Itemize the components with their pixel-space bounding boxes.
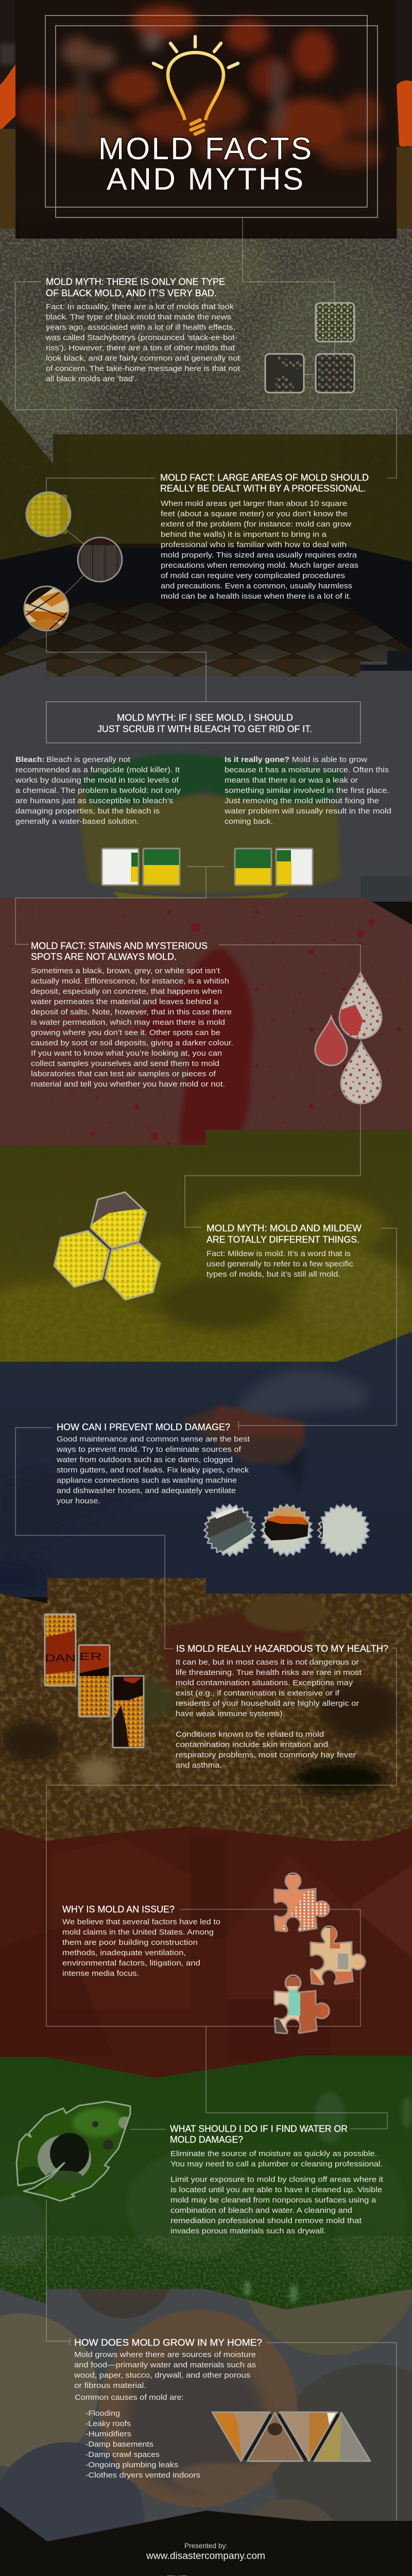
heading: IS MOLD REALLY HAZARDOUS TO MY HEALTH? bbox=[176, 1643, 388, 1654]
panel: what should I do bbox=[13, 2099, 384, 2235]
text: presented by: www.disastercompany.com bbox=[146, 2551, 265, 2562]
icon: light bulb bbox=[153, 37, 238, 134]
image: starburst badge 3 bbox=[313, 1503, 370, 1557]
text block: and precautions. Even a common, usually harmless bbox=[161, 582, 352, 590]
text block: invades porous materials such as drywall. bbox=[170, 2227, 326, 2235]
text block: years ago, associated with a lot of ill health effects, bbox=[46, 323, 235, 332]
text block: wood, paper, stucco, drywall, and other porous bbox=[74, 2371, 250, 2380]
text block: We believe that several factors have led to bbox=[62, 1918, 220, 1926]
text block: actually mold. Efflorescence, for instance, is a whitish bbox=[31, 977, 229, 986]
text block: was called Stachybotrys (pronounced ‘stack-ee-bot- bbox=[45, 333, 237, 342]
panel: bleach myth bbox=[15, 702, 391, 885]
text block: and asthma. bbox=[176, 1761, 222, 1770]
text block: Common causes of mold are: bbox=[75, 2393, 184, 2402]
heading: REALLY BE DEALT WITH BY A PROFESSIONAL. bbox=[160, 483, 366, 494]
panel: health hazard bbox=[45, 1614, 388, 1770]
text block: is water permeation, which may mean there is mold bbox=[31, 1018, 225, 1027]
list: common causes: -Ongoing plumbing leaks bbox=[85, 2461, 178, 2469]
panel: mildew myth bbox=[54, 1190, 362, 1300]
text block: is it gone: Mold is able to grow bbox=[292, 755, 367, 764]
panel background: olive room with floor bbox=[0, 397, 412, 680]
list: common causes: -Leaky roofs bbox=[85, 2419, 131, 2428]
heading box: JUST SCRUB IT WITH BLEACH TO GET RID OF IT. bbox=[97, 724, 312, 734]
panel background: soil with danger sign bbox=[0, 1578, 412, 1846]
text block: look black, and are fairly common and generally not bbox=[46, 354, 241, 363]
text block: Good maintenance and common sense are the best bbox=[57, 1435, 250, 1444]
heading: ARE TOTALLY DIFFERENT THINGS. bbox=[207, 1234, 359, 1245]
text block: is it gone bbox=[224, 755, 391, 826]
heading: MOLD DAMAGE? bbox=[170, 2134, 243, 2145]
text block: bleach: are humans just as susceptible to bleach’s bbox=[15, 796, 173, 805]
panel background: petri dishes bbox=[0, 2289, 412, 2541]
icon: puzzle piece 2 bbox=[310, 1926, 371, 1987]
list: common causes: -Damp basements bbox=[85, 2440, 153, 2449]
text block bbox=[170, 2149, 384, 2235]
panel background: red stained wall bbox=[0, 886, 412, 1154]
heading: HOW CAN I PREVENT MOLD DAMAGE? bbox=[57, 1422, 230, 1432]
heading: MOLD FACT: LARGE AREAS OF MOLD SHOULD bbox=[160, 472, 369, 483]
panel background: green water drops bbox=[0, 2056, 412, 2313]
text block: bleach: Bleach is generally not bbox=[46, 755, 131, 764]
text block: bleach: Bleach: bbox=[15, 755, 45, 764]
text block: water from outdoors such as ice dams, clogged bbox=[56, 1455, 233, 1464]
text block: have weak immune systems). bbox=[176, 1709, 285, 1718]
text block: Sometimes a black, brown, grey, or white spot isn’t bbox=[31, 967, 220, 975]
hero blurred mushroom background bbox=[15, 0, 397, 239]
text block: bleach: a chemical. The problem is twofold: not only bbox=[15, 786, 181, 795]
hero double frame bbox=[45, 15, 377, 217]
image: triangle crops bbox=[212, 2412, 370, 2461]
image: starburst badge 1 bbox=[203, 1503, 256, 1557]
text block: combination of bleach and water. A cleaning and bbox=[170, 2206, 352, 2215]
heading: MOLD MYTH: THERE IS ONLY ONE TYPE bbox=[46, 277, 225, 287]
text block: feet (about a square meter) or you don’t know the bbox=[161, 510, 348, 518]
heading: SPOTS ARE NOT ALWAYS MOLD. bbox=[31, 952, 177, 962]
text block: used generally to refer to a few specific bbox=[207, 1260, 354, 1268]
text block: Eliminate the source of moisture as quickly as possible. bbox=[170, 2149, 377, 2158]
heading bbox=[31, 941, 208, 962]
image: danger sign strips: ER bbox=[79, 1651, 102, 1663]
text block: material and tell you whether you have mold or not. bbox=[31, 1080, 225, 1089]
text block: of concern. The take-home message here is that not bbox=[46, 364, 241, 373]
text block: behind the walls) it is important to bring in a bbox=[161, 530, 327, 539]
icon: puzzle piece 3 bbox=[273, 1975, 335, 2036]
panel: hero bbox=[0, 0, 412, 239]
heading box: MOLD MYTH: IF I SEE MOLD, I SHOULD bbox=[117, 713, 293, 723]
image: sponge crops bbox=[102, 849, 313, 885]
text block: is it gone: means that there is or was a leak or bbox=[225, 776, 358, 785]
text block: contamination include skin irritation and bbox=[176, 1740, 328, 1749]
text block: When mold areas get larger than about 10 square bbox=[161, 499, 347, 508]
heading: OF BLACK MOLD, AND IT’S VERY BAD. bbox=[46, 288, 217, 298]
text block: them are poor building construction bbox=[62, 1938, 198, 1947]
text block: all black molds are ‘bad’. bbox=[46, 375, 137, 383]
heading: WHAT SHOULD I DO IF I FIND WATER OR bbox=[170, 2124, 348, 2134]
text block: mold properly. This sized area usually requires extra bbox=[161, 551, 357, 560]
text block: deposit, especially on concrete, that happens when bbox=[31, 987, 222, 996]
text block: bleach: recommended as a fungicide (mold killer). It bbox=[15, 766, 180, 774]
text block bbox=[62, 1918, 220, 1978]
panel: black mold myth bbox=[45, 277, 354, 393]
text block: collect samples yourselves and send them to mold bbox=[31, 1059, 219, 1068]
image: wood panel circle bbox=[78, 536, 122, 582]
text block: and dishwasher hoses, and adequately ventilate bbox=[57, 1486, 236, 1495]
title: AND MYTHS bbox=[107, 162, 303, 196]
text block: bleach bbox=[15, 755, 181, 826]
text block: mold may be cleaned from nonporous surfaces using a bbox=[170, 2196, 376, 2205]
text block: Conditions known to be related to mold bbox=[176, 1730, 324, 1739]
text block bbox=[30, 967, 233, 1089]
text block: If you want to know what you’re looking at, you can bbox=[31, 1049, 222, 1058]
text block: your house. bbox=[57, 1497, 100, 1505]
heading bbox=[160, 472, 369, 494]
panel background: floor extension and dark corner bbox=[46, 651, 412, 676]
text block: types of molds, but it’s still all mold. bbox=[207, 1270, 340, 1279]
text block: growing where you don’t see it. Other spots can be bbox=[31, 1028, 220, 1037]
panel background: red roofs bbox=[0, 1824, 412, 2081]
text block: water permeates the material and leaves behind a bbox=[30, 997, 219, 1006]
list: common causes: -Humidifiers bbox=[85, 2430, 131, 2438]
image: leaf with water drop bbox=[13, 2099, 134, 2202]
text block: ways to prevent mold. Try to eliminate sources of bbox=[56, 1445, 242, 1454]
image: starburst badge 2 bbox=[260, 1503, 314, 1557]
text block: Fact: In actuality, there are a lot of molds that look bbox=[46, 302, 234, 311]
text block: is it gone: coming back. bbox=[225, 817, 273, 826]
text block: laboratories that can test air samples or pieces of bbox=[31, 1070, 216, 1078]
text block bbox=[176, 1658, 362, 1770]
image: danger sign strips: DAN bbox=[45, 1653, 76, 1664]
text block: mold contamination situations. Exceptions may bbox=[176, 1679, 353, 1687]
text block: remediation professional should remove mold that bbox=[170, 2216, 362, 2225]
panel background: grey sponge bbox=[0, 662, 412, 904]
panel background: black footer bbox=[0, 2506, 412, 2545]
text block: and food—primarily water and materials such as bbox=[74, 2361, 256, 2369]
heading box bbox=[46, 702, 360, 743]
text block: of mold can require very complicated procedures bbox=[161, 571, 345, 580]
title: MOLD FACTS bbox=[98, 131, 312, 166]
text block: respiratory problems, most commonly hay fever bbox=[176, 1751, 356, 1759]
image: danger sign strips bbox=[45, 1614, 144, 1748]
text block: residents of your household are highly allergic or bbox=[176, 1699, 359, 1708]
heading: HOW DOES MOLD GROW IN MY HOME? bbox=[74, 2337, 262, 2348]
text block: deposit of salts. Note, however, that in this case there bbox=[31, 1008, 232, 1016]
text block: is it gone: Is it really gone? bbox=[225, 755, 289, 764]
text block: environmental factors, litigation, and bbox=[62, 1959, 200, 1968]
text block: precautions when removing mold. Much larger areas bbox=[161, 561, 358, 570]
panel background: black mold texture bbox=[0, 228, 412, 465]
list: common causes bbox=[85, 2409, 200, 2480]
hero side strips bbox=[0, 0, 412, 228]
text block: caused by soot or soil deposits, giving a darker colour. bbox=[31, 1039, 233, 1047]
text block: Limit your exposure to mold by closing off areas where it bbox=[170, 2175, 384, 2184]
heading: MOLD MYTH: MOLD AND MILDEW bbox=[207, 1223, 362, 1233]
heading bbox=[170, 2124, 348, 2145]
panel background: navy water bbox=[0, 1332, 412, 1600]
list: common causes: -Damp crawl spaces bbox=[85, 2450, 160, 2459]
text block: is it gone: water problem will usually result in the mold bbox=[224, 807, 391, 816]
text block: is it gone: something similar involved in the first place. bbox=[225, 786, 389, 795]
text block bbox=[45, 302, 241, 383]
text block: exist (e.g., if contamination is extensive or if bbox=[176, 1689, 340, 1698]
text block: bleach: generally a water-based solution. bbox=[15, 817, 139, 826]
image: floor tile circle bbox=[23, 585, 70, 633]
text block: methods, inadequate ventilation, bbox=[62, 1948, 186, 1957]
text block: riss’). However, there are a ton of other molds that bbox=[46, 344, 235, 352]
text block: Fact: Mildew is mold. It’s a word that is bbox=[207, 1249, 351, 1258]
text block: storm gutters, and roof leaks. Fix leaky pipes, check bbox=[57, 1466, 249, 1475]
image: wallpaper circle bbox=[26, 492, 71, 536]
text block: is it gone: Just removing the mold without fixing the bbox=[225, 796, 379, 805]
image: honeycomb hexagons bbox=[54, 1190, 160, 1300]
text block: mold can be a health issue when there is a lot of it. bbox=[161, 592, 351, 601]
text block bbox=[56, 1435, 250, 1505]
text block: extent of the problem (for instance: mold can grow bbox=[161, 520, 351, 529]
text block: appliance connections such as washing machine bbox=[57, 1476, 237, 1485]
text block: Mold grows where there are sources of moisture bbox=[74, 2350, 256, 2359]
text block: intense media focus. bbox=[62, 1969, 139, 1978]
heading: WHY IS MOLD AN ISSUE? bbox=[62, 1904, 175, 1914]
text block bbox=[74, 2350, 256, 2402]
panel: why is mold an issue bbox=[62, 1873, 371, 2036]
text block: mold claims in the United States. Among bbox=[62, 1928, 214, 1937]
panel: footer bbox=[120, 2541, 293, 2576]
panel: stains fact bbox=[30, 941, 382, 1104]
text block: It can be, but in most cases it is not dangerous or bbox=[176, 1658, 359, 1667]
text: presented by bbox=[146, 2541, 265, 2562]
text block bbox=[207, 1249, 354, 1279]
panel background: yellow moss field bbox=[0, 1128, 412, 1376]
heading: MOLD FACT: STAINS AND MYSTERIOUS bbox=[31, 941, 208, 951]
text: presented by: Presented by: bbox=[184, 2541, 228, 2550]
text block: is it gone: because it has a moisture source. Often this bbox=[225, 766, 389, 774]
text block: black. The type of black mold that made the news bbox=[46, 313, 231, 321]
text block: professional who is familiar with how to deal with bbox=[161, 540, 347, 549]
text block: life threatening. True health risks are rare in most bbox=[176, 1668, 362, 1677]
text block: is located until you are able to have it cleaned up. Visible bbox=[170, 2185, 382, 2194]
panel: large areas fact bbox=[23, 472, 369, 633]
text block bbox=[161, 499, 358, 601]
list: common causes: -Clothes dryers vented indoors bbox=[85, 2471, 200, 2480]
text block: bleach: works by dousing the mold in toxic levels of bbox=[15, 776, 179, 785]
list: common causes: -Flooding bbox=[85, 2409, 120, 2418]
heading bbox=[207, 1223, 362, 1245]
panel: how does mold grow bbox=[74, 2337, 370, 2480]
icon: three stained drops bbox=[315, 973, 382, 1104]
text block: You may need to call a plumber or cleaning professional. bbox=[170, 2160, 383, 2168]
text block: bleach: damaging properties, but the bleach is bbox=[15, 807, 160, 816]
icon: puzzle piece 1 bbox=[273, 1873, 335, 1934]
panel: prevent damage bbox=[56, 1422, 370, 1557]
text block: or fibrous material. bbox=[74, 2381, 146, 2390]
image: mold close-ups bbox=[265, 303, 354, 393]
title bbox=[98, 131, 312, 196]
heading bbox=[46, 277, 225, 298]
